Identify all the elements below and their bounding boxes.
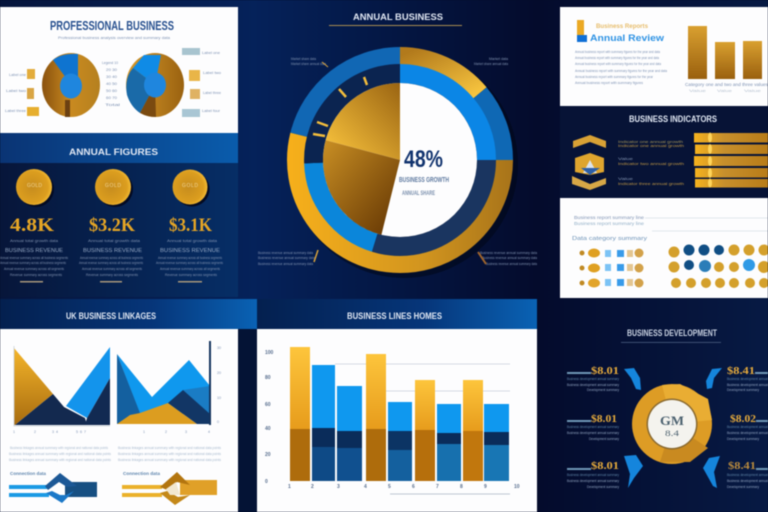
stat: upper left [567,365,619,392]
caption left [9,446,111,462]
callout: top left: Market share annual data [291,62,326,66]
paragraph: Annual business report with summary figures [575,81,643,85]
section: radial diagram [567,328,768,489]
metric 1: 4.8K [10,215,54,236]
metric 3: Annual revenue summary across all business segments [158,256,222,260]
dark column beside lower panel [238,329,257,512]
header band: annual figures [0,133,238,163]
stat: middle left: $8.01 [591,413,617,425]
callout: top right: Market share annual data [474,62,508,66]
paragraph: Annual business report with summary figures for the year and data [575,62,661,66]
metric 1 [0,215,68,282]
arrow: gold connector [122,471,217,505]
middle ring [314,74,486,246]
caption right: Business linkages annual summary with regional and national data points [118,446,221,450]
callout: top right [474,57,508,66]
pie wedge: lower gold [323,140,400,235]
paragraph: Annual business report with summary figures for the year and data [575,50,660,54]
section: strategy indicators [560,106,768,198]
gold bar chart [685,26,768,93]
central sublabel: ANNUAL SHARE [402,191,435,197]
pie wedge: upper gold [326,83,400,160]
caption left: Business linkages annual summary with regional and national data points [9,458,111,462]
area chart right: 1234 [143,430,210,434]
caption left: Business linkages annual summary with regional and national data points [9,452,111,456]
large dot grid [668,244,768,288]
metric 3: Annual revenue summary across all business segments [156,261,223,265]
metric 1: Annual revenue summary across all business segments [0,261,66,265]
indicator text: Indicator two annual growth [618,161,684,166]
gold heading: Business Reports [596,24,649,30]
grid lines and axis: 40 [265,426,271,432]
metric 1: Annual revenue summary across all segments [4,267,64,271]
stat: lower right: $8.41 [728,460,756,472]
right labels with icons: Label two [203,71,221,75]
panel: professional business [0,7,238,133]
stat: lower left: Business development annual summary [567,479,619,483]
grid lines and axis: 100 [265,350,274,356]
left labels with icons [5,69,39,116]
metric 2: Annual total growth data [88,239,140,243]
caption right [118,446,221,462]
left labels with icons: Label one [9,73,26,77]
callout: top right: Market data [489,57,508,61]
icon: blue shape upper left [624,368,641,390]
metric 2: BUSINESS REVENUE [83,248,143,254]
central gold ring: GM [660,413,684,428]
blue heading: Annual Review [590,33,665,43]
metric 2: Revenue summary across segments [86,273,138,277]
metric 3 [156,215,223,282]
centre legend between pies: 20 30 [106,68,117,72]
metric 3: $3.1K [169,215,212,236]
header band: bottom centre: BUSINESS LINES HOMES [347,311,442,321]
stat: upper right: $8.41 [727,365,755,377]
text block: Data category summary [572,236,647,242]
metric 3: BUSINESS REVENUE [160,248,221,254]
stat: middle left: Business development annual summary [567,425,619,429]
right labels with icons [182,48,221,117]
indicator text [618,139,684,186]
central gold ring [632,384,712,464]
stat: lower left [567,460,619,489]
caption left: Business linkages annual summary with regional and national data points [10,446,108,450]
central label: BUSINESS GROWTH [399,177,449,184]
centre legend between pies: 30 40 [106,75,117,79]
inner white disc [323,83,477,237]
caption right: Business linkages annual summary with regional and national data points [118,458,221,462]
centre legend between pies: 50 60 [106,89,117,93]
arrow: gold connector: Connection data [123,471,161,476]
centre legend between pies [102,61,120,107]
metric 1: Revenue summary across segments [10,273,62,277]
panel: area charts [0,329,238,512]
panel: dot matrix [560,198,768,298]
callout: top left: Market share data [291,57,316,61]
x axis labels: 123456789 10 [288,484,520,490]
coin 1: GOLD [27,183,42,189]
stat: upper left: $8.01 [591,365,619,377]
stat: lower right [727,460,768,489]
stat: lower left: Development summary [587,485,619,489]
metric 3: Annual total growth data [167,239,217,243]
callout: bottom left: Business revenue annual summary data [258,256,315,260]
subtitle: Professional business analysis overview and summary data [58,36,170,40]
indicator text: Value [618,176,634,181]
stat: middle left: Business development annual summary [567,431,619,435]
left labels with icons: Label three [5,109,26,113]
metric 1: BUSINESS REVENUE [5,248,64,254]
gold bar chart: Category one and two and three values [685,82,768,87]
icon: blue shape lower left [624,455,643,488]
left labels with icons: Label two [6,89,26,93]
area chart right: 0 [217,420,219,424]
gold bar chart: Value [689,89,706,93]
text block [572,215,768,242]
metric 1: Annual total growth data [10,239,58,243]
pie chart right [126,53,184,117]
coin 1 [16,169,54,207]
right labels with icons: Label three [203,91,221,95]
heading: BUSINESS DEVELOPMENT [627,328,717,338]
blue bars [312,365,509,481]
small icon grid [580,248,644,288]
header band: bottom left: UK BUSINESS LINKAGES [66,311,156,321]
icon: blue shape upper right [706,368,722,389]
arrow: blue connector: Connection data [10,471,46,476]
header band: bottom centre [257,299,537,329]
area chart right [117,341,221,434]
panel: grouped bar chart [257,329,537,512]
coin 3: GOLD [182,183,198,189]
grid lines and axis: 20 [265,452,271,458]
pie chart left [42,53,100,117]
paragraph: Annual business report with summary figures for the year and data [575,56,659,60]
panel: three gold coin metrics [0,163,238,297]
metric 3: Revenue summary across segments [165,273,217,277]
central gold ring: 8.4 [665,429,679,438]
stat: lower left: Business development annual summary [567,473,619,477]
callout: bottom right: Business revenue annual summary data [480,251,537,255]
stat: middle right: Development summary [727,437,759,441]
metric 2: $3.2K [89,215,135,236]
arrow: blue connector [9,471,97,503]
indicator text: Value [618,156,634,161]
indicator text: Indicator three annual growth [618,181,684,186]
indicator text: Indicator one annual growth [618,143,684,148]
coin 2 [95,169,133,207]
stat: upper left: Development summary [587,388,619,392]
grid lines and axis: 80 [265,375,271,381]
area chart left [13,346,110,434]
centre legend between pies: 60 70 [106,96,117,100]
outer ring [296,56,504,264]
grid lines and axis: 0 [265,479,268,485]
paragraph: Annual business report with summary figures for the year [575,75,654,79]
stat: upper right: Development summary [727,388,759,392]
centre legend between pies: Legend 10 [102,61,118,65]
paragraph: Annual business report with summary figures for the year and data [575,69,667,73]
tick marks [313,77,367,136]
metric 2: Annual revenue summary across all segments [82,267,142,271]
stat: upper left: Business development annual summary [567,377,619,381]
header band: bottom left [0,299,257,329]
panel: top right report [560,7,768,106]
coin 2: GOLD [105,183,121,189]
stat: lower right: Development summary [727,485,759,489]
gold bar chart: Value [717,89,732,93]
paragraph [575,50,667,85]
callout: bottom left: Business revenue annual summary data [258,262,313,266]
grid lines and axis: 60 [265,402,271,408]
central donut chart [290,50,518,278]
stat: middle right [727,413,768,441]
stat: upper right [727,365,768,392]
right labels with icons: Label one [202,51,220,55]
right labels with icons: Label four [202,109,221,113]
icon: gold chevron stack [572,135,606,190]
callout: top left [291,57,328,67]
stat: middle right: $8.02 [730,413,757,425]
stat: lower left: $8.01 [591,460,619,472]
caption right: Business linkages annual summary with regional and national data points [118,452,221,456]
stat: middle left: Development summary [589,437,619,441]
header band: annual figures: ANNUAL FIGURES [69,147,158,157]
gold bars [290,347,483,481]
callout: bottom right: Business revenue annual summary data [482,256,537,260]
area chart right: 10 [217,396,221,400]
indicator text: Indicator one annual growth [618,139,683,144]
central value: 48% [404,146,443,173]
callout: bottom right: Business revenue annual summary data [486,262,537,266]
callout: bottom left: Business revenue annual summary data [258,251,313,255]
icon: blue shape lower right [703,456,720,488]
stat: middle left [567,413,619,441]
central heading: ANNUAL BUSINESS [353,12,443,22]
coin 3 [172,170,210,206]
icon: gold blue marker [577,20,584,41]
central heading [329,12,462,26]
centre legend between pies: Total [105,103,120,107]
gold bar chart: Value [744,89,761,93]
gold horizontal bars [694,132,768,188]
area chart right: 20 [217,371,221,375]
metric 3: Annual revenue summary across all segments [160,267,220,271]
text block: Business report summary line [574,221,645,226]
callout: bottom right [478,251,537,266]
metric 2 [79,215,143,282]
grid lines and axis [265,350,510,485]
metric 2: Annual revenue summary across all business segments [80,256,143,260]
stat: upper left: Business development annual summary [567,383,619,387]
metric 2: Annual revenue summary across all business segments [79,261,143,265]
callout: bottom left [258,250,318,266]
heading: professional business: PROFESSIONAL BUSINESS [50,18,174,33]
heading: BUSINESS INDICATORS [629,114,717,124]
area chart right: 30 [217,346,221,350]
text block: Business report summary line [574,215,645,220]
metric 1: Annual revenue summary across all business segments [0,256,68,260]
centre legend between pies: 40 50 [106,82,117,86]
area chart left: 1234567 [13,430,86,434]
